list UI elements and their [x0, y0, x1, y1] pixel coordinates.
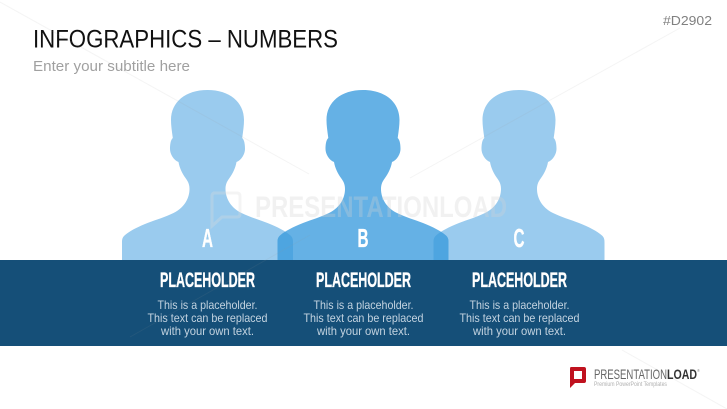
column B text: This is a placeholder. [314, 298, 414, 312]
logo [570, 366, 700, 388]
letter C: C [514, 223, 525, 253]
logo: Premium PowerPoint Templates [594, 382, 667, 388]
column C text [460, 269, 580, 338]
watermark [212, 191, 507, 226]
column C text: with your own text. [472, 324, 566, 338]
watermark: PRESENTATIONLOAD [255, 191, 507, 224]
silhouette B [278, 90, 448, 260]
column C text: This text can be replaced [460, 311, 580, 325]
band [0, 260, 727, 346]
column A text: PLACEHOLDER [160, 269, 255, 292]
column B text: with your own text. [316, 324, 410, 338]
product code: #D2902 [663, 13, 712, 28]
column A text: This is a placeholder. [158, 298, 258, 312]
column A text: This text can be replaced [148, 311, 268, 325]
silhouette C [434, 90, 604, 260]
logo: PRESENTATION [594, 366, 667, 382]
letter A: A [202, 223, 213, 253]
column A text: with your own text. [160, 324, 254, 338]
logo: ® [697, 368, 700, 373]
silhouette A [122, 90, 293, 260]
column C text: PLACEHOLDER [472, 269, 567, 292]
logo: LOAD [667, 366, 697, 382]
title: INFOGRAPHICS – NUMBERS [33, 26, 338, 54]
column B text [304, 269, 424, 338]
column A text [148, 269, 268, 338]
column C text: This is a placeholder. [470, 298, 570, 312]
column B text: This text can be replaced [304, 311, 424, 325]
subtitle: Enter your subtitle here [33, 58, 190, 75]
column B text: PLACEHOLDER [316, 269, 411, 292]
letter B: B [358, 223, 368, 253]
